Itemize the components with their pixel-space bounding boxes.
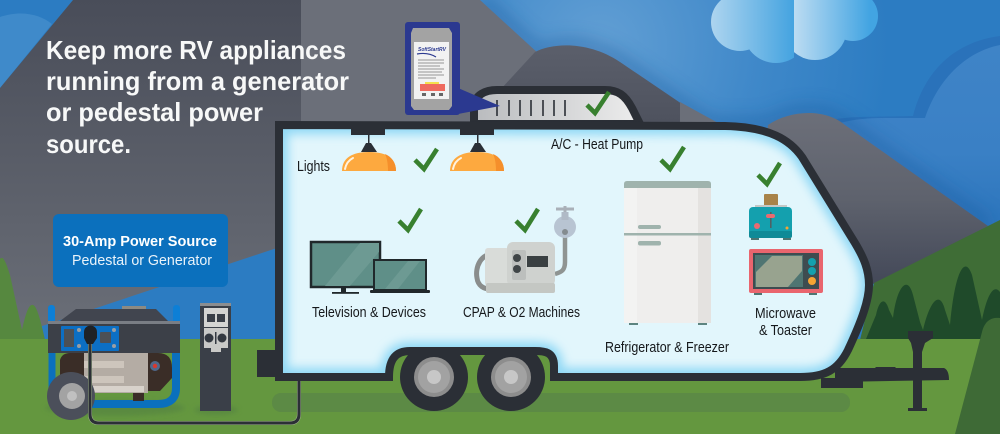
ground bbox=[0, 339, 1000, 434]
wheels bbox=[400, 343, 545, 411]
trailer ground shadow bbox=[272, 393, 850, 412]
check mark: A/C bbox=[587, 92, 609, 113]
icon: television and laptop bbox=[311, 242, 430, 294]
ridge shadow on the sky bbox=[480, 0, 988, 226]
label: microwave and toaster: & Toaster bbox=[759, 323, 812, 339]
icon: microwave bbox=[749, 249, 823, 295]
title bbox=[46, 35, 349, 159]
trailer body bbox=[279, 125, 869, 377]
power cable bbox=[84, 326, 299, 423]
label: microwave and toaster: Microwave bbox=[755, 306, 816, 322]
icon: refrigerator bbox=[624, 181, 711, 325]
distant blue hills bbox=[0, 13, 1000, 260]
check mark: television bbox=[399, 209, 421, 230]
title: or pedestal power bbox=[46, 97, 263, 127]
left trailer bumper bbox=[257, 350, 287, 377]
label: television: Television & Devices bbox=[312, 305, 426, 321]
check mark: lights bbox=[415, 149, 437, 169]
callout: surge protector product: SoftStartRV bbox=[418, 47, 447, 53]
check mark: refrigerator bbox=[661, 147, 684, 169]
label: lights: Lights bbox=[297, 159, 330, 175]
label: CPAP: CPAP & O2 Machines bbox=[463, 305, 580, 321]
label: A/C heat pump: A/C - Heat Pump bbox=[551, 137, 643, 153]
grey mountains bbox=[0, 0, 988, 340]
green hill and trees on the right bbox=[860, 220, 1000, 340]
icon: CPAP machine bbox=[477, 206, 576, 293]
callout: surge protector product bbox=[405, 22, 500, 115]
roof air conditioner bbox=[474, 90, 640, 124]
check mark: CPAP bbox=[516, 209, 538, 230]
cloud bbox=[711, 0, 878, 63]
power source panel bbox=[53, 214, 228, 287]
lamp 1 bbox=[342, 128, 396, 171]
label: refrigerator: Refrigerator & Freezer bbox=[605, 340, 729, 356]
title: Keep more RV appliances bbox=[46, 35, 346, 65]
generator bbox=[45, 305, 185, 420]
icon: toaster bbox=[749, 194, 792, 240]
power source panel: Pedestal or Generator bbox=[72, 253, 212, 269]
check mark: toaster bbox=[758, 163, 780, 184]
foreground tree bbox=[955, 318, 1000, 434]
trailer hitch bbox=[821, 331, 949, 411]
power source panel: 30-Amp Power Source bbox=[63, 234, 217, 250]
green trees on the left bbox=[0, 258, 45, 340]
lamp 2 bbox=[450, 128, 504, 171]
pedestal power post bbox=[194, 303, 238, 415]
title: running from a generator bbox=[46, 66, 349, 96]
label: microwave and toaster bbox=[755, 306, 816, 339]
title: source. bbox=[46, 129, 131, 159]
